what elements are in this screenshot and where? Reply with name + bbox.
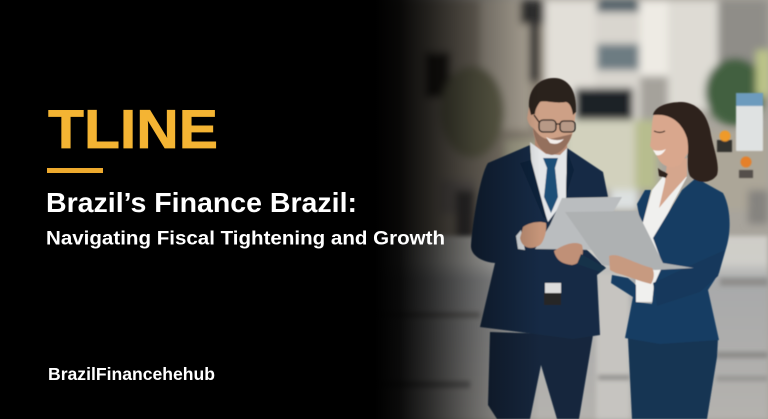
- background: blurred city street: [340, 0, 768, 419]
- man's left hand: [520, 222, 546, 248]
- man's hair: [529, 78, 576, 115]
- man's head: [527, 92, 576, 155]
- figure: woman in navy suit: [565, 102, 730, 419]
- woman's shirt: [635, 174, 687, 302]
- woman's laptop: [565, 211, 694, 270]
- left black fade panel: [0, 0, 540, 419]
- woman's jacket: [611, 178, 730, 344]
- woman's hand: [609, 255, 654, 284]
- man's stubble: [533, 128, 572, 155]
- icon: blurred street sign: [736, 93, 763, 151]
- subtitle: Navigating Fiscal Tightening and Growth: [46, 228, 445, 250]
- woman's smile: [653, 149, 666, 155]
- man's shirt hem: [545, 283, 561, 293]
- man's shirt: [530, 142, 567, 225]
- woman's neck: [659, 158, 687, 208]
- man's right sleeve: [577, 254, 606, 272]
- woman's trousers: [628, 338, 718, 419]
- woman's hair: [653, 102, 718, 182]
- man's back laptop: [535, 197, 622, 250]
- man's cuff: [516, 230, 525, 250]
- brand footer: BrazilFinancehehub: [48, 364, 215, 384]
- accent rule: [47, 168, 103, 173]
- traffic lights: [717, 130, 753, 178]
- man's lapel shadow: [520, 150, 574, 220]
- man's glasses: [534, 115, 575, 132]
- man's right hand: [554, 243, 583, 265]
- man's belt: [544, 293, 561, 305]
- woman's eye: [654, 131, 665, 132]
- figure: man in navy suit: [471, 78, 622, 419]
- man's trousers: [488, 332, 593, 419]
- man's neck: [535, 130, 567, 158]
- woman's sleeve: [653, 250, 725, 306]
- woman's face: [650, 108, 694, 167]
- man's jacket: [471, 145, 608, 339]
- title: Brazil’s Finance Brazil:: [46, 187, 357, 218]
- man's smile: [546, 137, 564, 144]
- heading: TLINE: TLINE: [48, 98, 218, 160]
- woman's lower hair: [658, 168, 668, 178]
- man's tie: [543, 158, 558, 213]
